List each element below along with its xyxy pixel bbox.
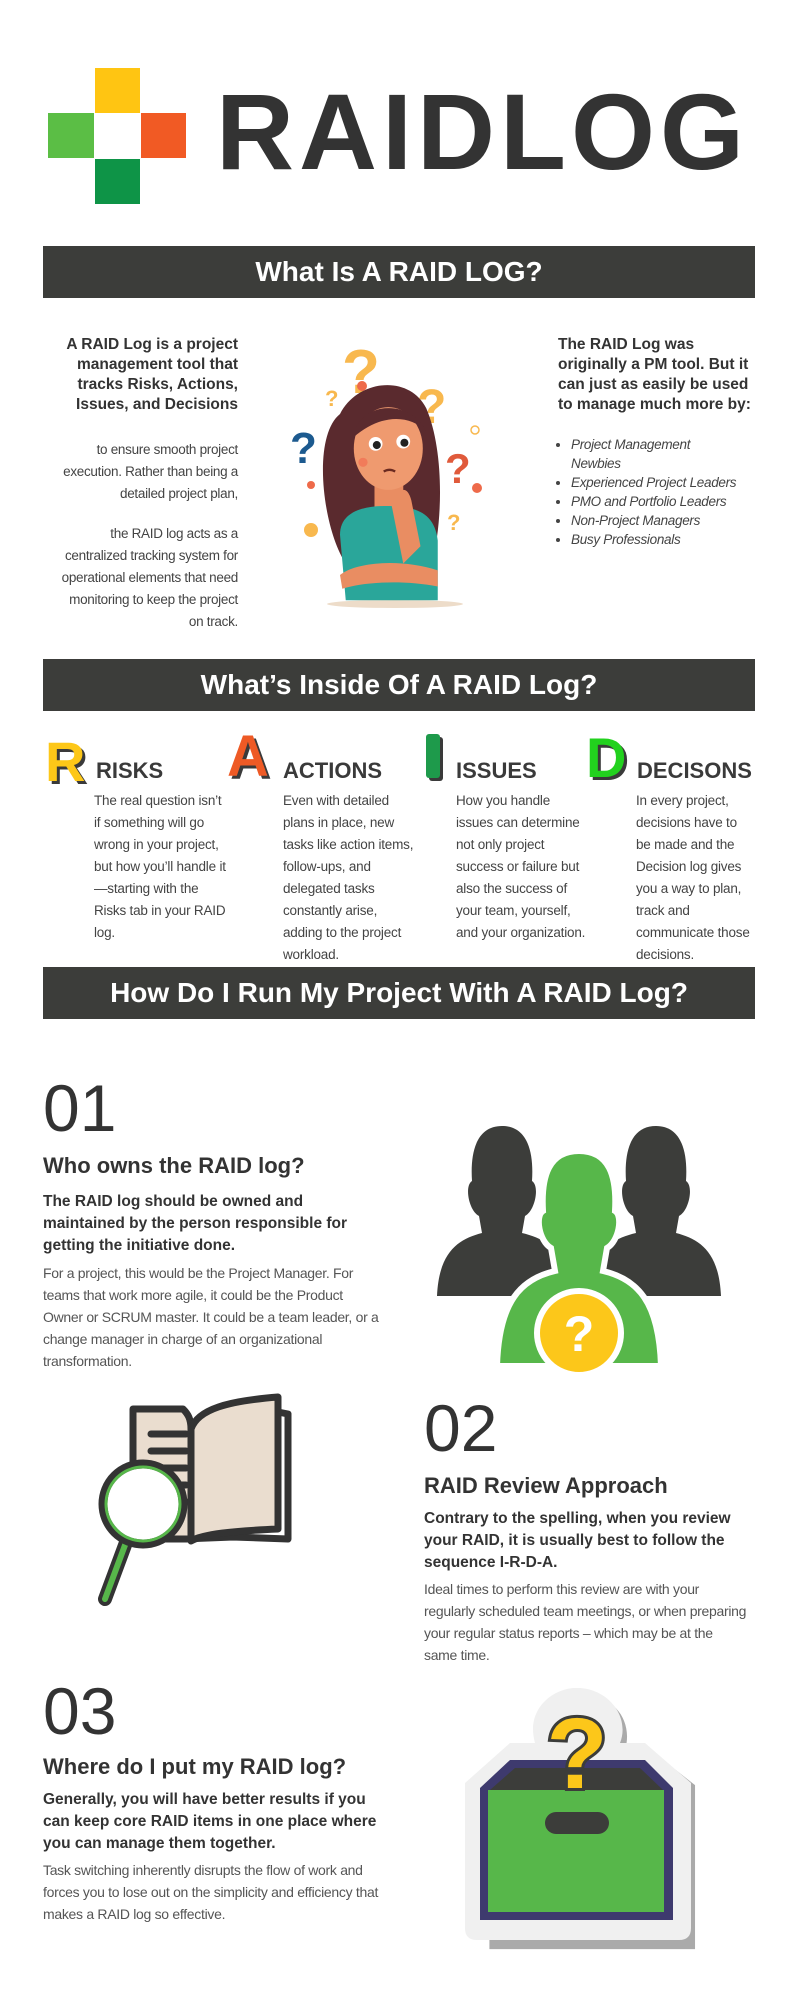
- banner: What Is A RAID LOG: [43, 246, 755, 298]
- step 02: Contrary to the spelling, when you review your RAID, it is usually best to follow the sequence I-R-D-A.: [424, 1510, 731, 1571]
- text: left intro: to ensure smooth project execution. Rather than being a detailed project plan,: [63, 442, 238, 501]
- icon: letter I: [426, 734, 440, 778]
- illustration: thinking woman: ?: [325, 386, 338, 411]
- step 01: [43, 1071, 379, 1369]
- step 03: 03: [43, 1674, 116, 1748]
- text: right intro with list: Busy Professionals: [571, 532, 680, 547]
- icon: people with question: [437, 1126, 721, 1372]
- step 02: RAID Review Approach: [424, 1473, 668, 1498]
- text: left intro: A RAID Log is a project management tool that tracks Risks, Actions, Issues, and Decisions: [66, 336, 238, 413]
- step 02: [424, 1391, 746, 1663]
- text: left intro: [62, 336, 238, 629]
- text: right intro with list: The RAID Log was originally a PM tool. But it can just as easily be used to manage much more by:: [558, 336, 751, 413]
- text: right intro with list: Experienced Project Leaders: [571, 475, 736, 490]
- panel: issues: ISSUES: [456, 758, 537, 783]
- step 01: 01: [43, 1071, 116, 1145]
- panel: decisions: DECISONS: [637, 758, 752, 783]
- step 02: 02: [424, 1391, 497, 1465]
- panel: decisions: In every project, decisions have to be made and the Decision log gives you a way to plan, track and communicate those decisions.: [636, 793, 750, 962]
- step 01: Who owns the RAID log?: [43, 1153, 305, 1178]
- icon: color cross: [48, 68, 186, 204]
- banner: How Do I Run: How Do I Run My Project With A RAID Log?: [110, 977, 688, 1008]
- text: right intro with list: PMO and Portfolio Leaders: [571, 494, 726, 509]
- step 03: Task switching inherently disrupts the flow of work and forces you to lose out on the simplicity and efficiency that makes a RAID log so effective.: [43, 1862, 378, 1922]
- step 03: Generally, you will have better results if you can keep core RAID items in one place where you can manage them together.: [43, 1791, 376, 1852]
- illustration: thinking woman: ?: [290, 424, 317, 473]
- step 01: For a project, this would be the Project Manager. For teams that work more agile, it could be the Product Owner or SCRUM master. It could be a team leader, or a change manager in charge of an organizational transformation.: [43, 1265, 379, 1369]
- text: left intro: the RAID log acts as a centralized tracking system for operational elements that need monitoring to keep the project on track.: [62, 526, 238, 629]
- text: right intro with list: Project Management Newbies: [571, 437, 690, 471]
- banner: How Do I Run: [43, 967, 755, 1019]
- illustration: thinking woman: ?: [445, 445, 471, 492]
- logo: [48, 68, 749, 204]
- icon: box with question mark: [465, 1688, 695, 1950]
- text: right intro with list: [556, 336, 751, 547]
- step 01: The RAID log should be owned and maintained by the person responsible for getting the initiative done.: [43, 1193, 347, 1254]
- illustration: thinking woman: ?: [417, 381, 446, 434]
- panel: issues: [426, 734, 585, 940]
- illustration: thinking woman: [290, 338, 482, 608]
- banner: What Is A RAID LOG: What Is A RAID LOG?: [255, 256, 543, 287]
- icon: book with magnifier: [98, 1394, 292, 1606]
- panel: risks: RISKS: [96, 758, 163, 783]
- banner: What's Inside: What’s Inside Of A RAID Log?: [201, 669, 597, 700]
- logo text: RAIDLOG: [216, 71, 749, 192]
- icon: letter R: R: [45, 730, 85, 793]
- icon: letter A: A: [227, 724, 269, 789]
- banner: What's Inside: [43, 659, 755, 711]
- icon: letter D: D: [586, 726, 626, 789]
- panel: risks: [45, 730, 226, 940]
- panel: risks: The real question isn’t if something will go wrong in your project, but how you’ll handle it—starting with the Risks tab in your RAID log.: [94, 793, 226, 940]
- step 03: Where do I put my RAID log?: [43, 1754, 346, 1779]
- icon: box with question mark: ?: [546, 1698, 608, 1810]
- icon: people with question: ?: [564, 1306, 594, 1362]
- illustration: thinking woman: ?: [342, 338, 380, 407]
- panel: actions: Even with detailed plans in place, new tasks like action items, follow-ups, and delegated tasks constantly arise, adding to the project workload.: [283, 793, 413, 962]
- panel: decisions: [586, 726, 752, 962]
- panel: actions: ACTIONS: [283, 758, 382, 783]
- step 02: Ideal times to perform this review are with your regularly scheduled team meetings, or when preparing your regular status reports – which may be at the same time.: [424, 1581, 746, 1663]
- illustration: thinking woman: ?: [447, 510, 460, 535]
- panel: actions: [227, 724, 413, 962]
- text: right intro with list: Non-Project Managers: [571, 513, 700, 528]
- panel: issues: How you handle issues can determine not only project success or failure but also the success of your team, yourself, and your organization.: [456, 793, 585, 940]
- step 03: [43, 1674, 378, 1922]
